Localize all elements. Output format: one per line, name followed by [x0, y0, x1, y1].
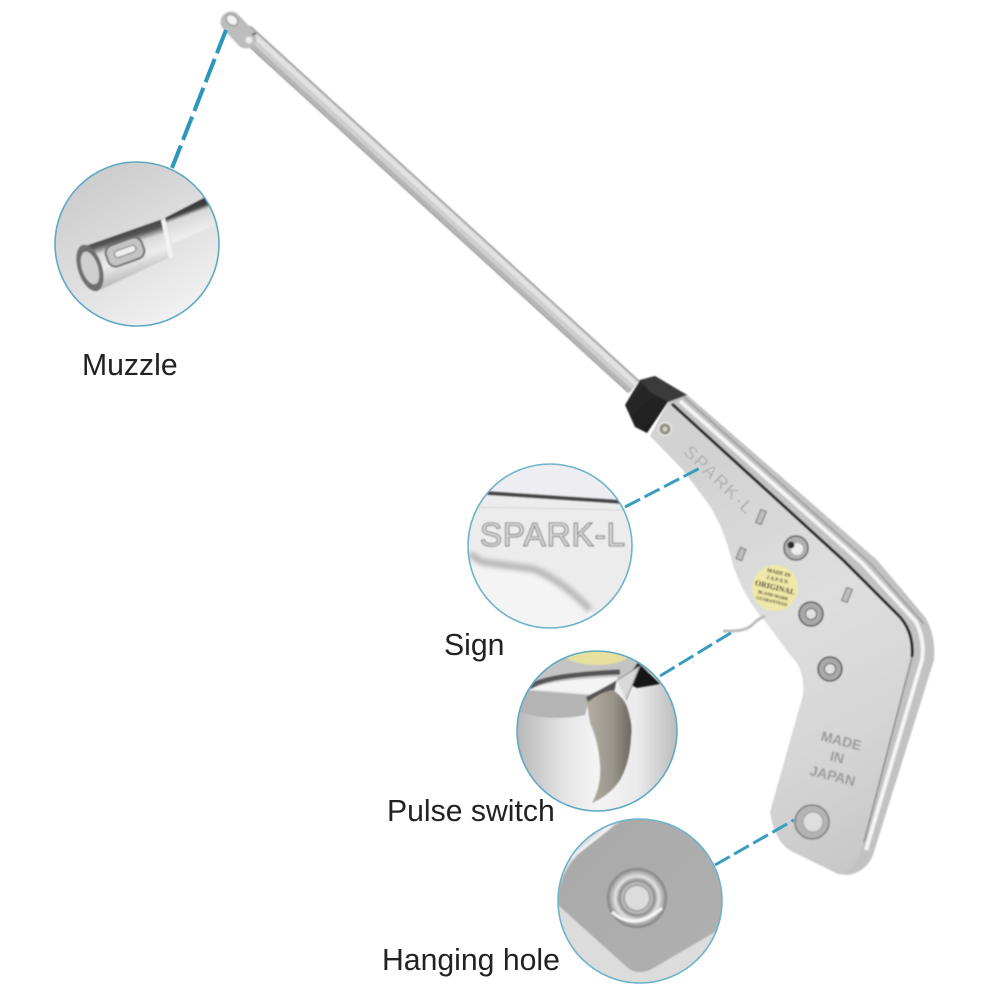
embossed sign text: SPARK-L — [679, 441, 758, 519]
hanging hole — [795, 805, 829, 839]
lighter product — [224, 12, 934, 875]
gold sticker: MADE IN — [766, 568, 791, 579]
label: sign: Sign — [444, 629, 504, 662]
gold sticker: BLAND MARK — [757, 589, 789, 602]
embossed made in japan text: IN — [828, 748, 846, 767]
rivets — [784, 536, 842, 681]
connector: hanging hole — [715, 820, 794, 865]
panel: sign detail — [460, 460, 640, 628]
plate band — [490, 490, 617, 501]
gray streak under band — [520, 690, 590, 718]
front screw — [658, 422, 672, 436]
gold sticker: ORIGINAL — [754, 578, 796, 597]
washer — [607, 868, 667, 928]
black collar — [632, 662, 660, 689]
dark seam — [672, 404, 912, 657]
panel: muzzle detail — [55, 162, 222, 326]
embossed made in japan text: MADE — [819, 728, 863, 753]
barrel — [86, 219, 172, 290]
rounded plate — [558, 820, 722, 973]
panel: pulse switch detail — [515, 640, 677, 811]
muzzle face — [76, 244, 104, 292]
connector: muzzle — [172, 30, 226, 168]
highlight edge — [572, 826, 612, 858]
black collar — [625, 376, 687, 433]
label: hanging hole: Hanging hole — [382, 944, 560, 977]
gold sticker: GUARANTEED — [756, 595, 789, 608]
tube — [164, 198, 214, 243]
sign text: SPARK-L — [480, 516, 625, 553]
gas slot — [103, 235, 147, 269]
rod — [224, 12, 637, 391]
upper plate — [535, 658, 651, 684]
bright band — [530, 677, 620, 693]
connector: sign — [625, 467, 702, 507]
switch blade — [587, 690, 632, 803]
embossed made in japan text: JAPAN — [808, 762, 857, 789]
panel: hanging hole detail — [558, 810, 730, 983]
rim of the handle — [668, 393, 934, 875]
label: muzzle: Muzzle — [82, 349, 178, 382]
connector: pulse switch — [660, 631, 734, 676]
label: pulse switch: Pulse switch — [387, 795, 555, 828]
handle plate — [650, 402, 912, 874]
pulse switch wire — [723, 616, 765, 631]
embossed made in japan text — [808, 727, 866, 789]
gold sticker — [751, 565, 799, 611]
slots — [736, 509, 852, 603]
gold sticker: J A P A N — [766, 575, 788, 586]
